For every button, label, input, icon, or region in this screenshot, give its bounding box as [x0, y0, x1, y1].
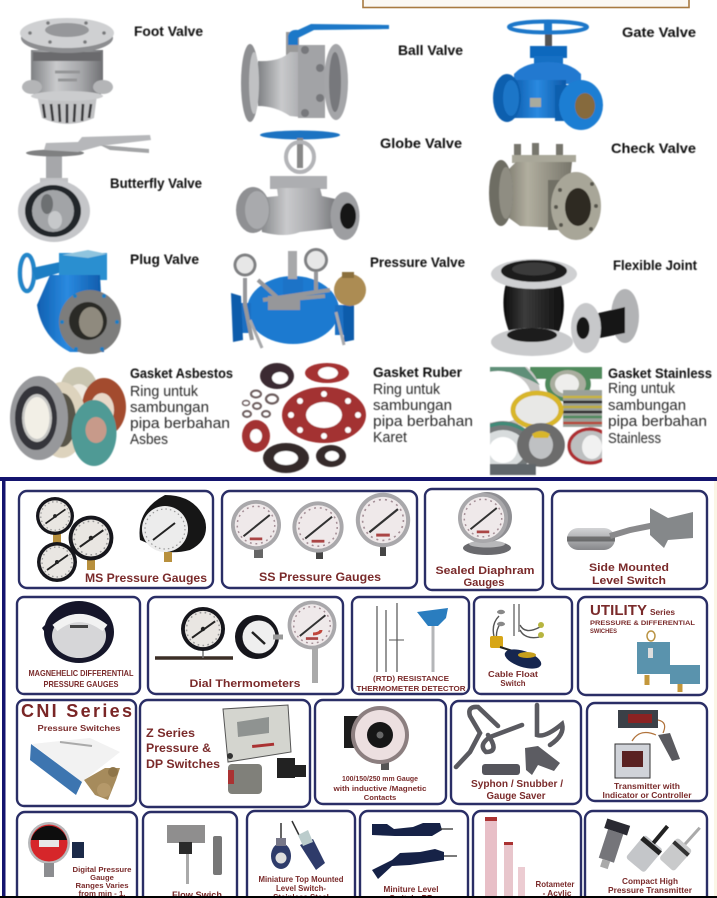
icon: check valve: [489, 143, 601, 240]
label: compact transmitter: Pressure Transmitter: [608, 886, 693, 895]
label: gasket ruber: Ring untuk: [373, 382, 441, 398]
product grid: valves: [10, 18, 712, 475]
icon: flow switch: [167, 825, 222, 884]
label: Z series: Pressure &: [146, 742, 212, 755]
icon: rubber gaskets: [242, 363, 366, 473]
icon: mini level switches: [372, 823, 457, 879]
label: sealed diaphragm gauges: Sealed Diaphram: [436, 565, 535, 577]
icon: digital gauge: [28, 822, 84, 877]
label: globe valve: Globe Valve: [380, 135, 462, 151]
label: RTD detector: (RTD) RESISTANCE: [373, 674, 449, 683]
label: transmitter: Transmitter with: [614, 782, 680, 791]
icon: magnehelic gauge: [42, 601, 114, 663]
label: CNI series: CNI Series: [21, 701, 132, 721]
panel: flow switch: [143, 812, 237, 898]
label: gasket asbestos: [130, 365, 233, 448]
panel: rotameter: [473, 811, 581, 898]
label: digital pressure gauge: from min - 1,: [78, 889, 126, 898]
icon: rotameter tubes: [485, 817, 525, 896]
icon: butterfly valve: [18, 135, 151, 242]
panel: compact transmitter: [585, 811, 707, 898]
panel: dial thermometers: [148, 597, 343, 694]
icon: mini top switches: [271, 821, 325, 870]
panel: MS pressure gauges: [19, 491, 213, 588]
label: flexible joint: Flexible Joint: [613, 257, 697, 273]
label: rotameter: Rotameter: [536, 880, 575, 889]
panel: miniature level switch: [360, 811, 468, 898]
panel: sealed diaphragm gauges: [425, 489, 543, 590]
label: check valve: Check Valve: [611, 140, 696, 156]
label: gasket ruber: Karet: [373, 430, 407, 446]
label: miniature top mounted: Miniature Top Mounted: [258, 875, 344, 884]
label: gasket asbestos: pipa berbahan: [130, 416, 230, 432]
label: gasket ruber: sambungan: [373, 398, 452, 414]
icon: asbestos gaskets: [10, 367, 126, 466]
label: compact transmitter: Compact High: [622, 877, 678, 886]
label: gasket stainless: Ring untuk: [608, 381, 676, 397]
label: cable float switch: Cable Float: [488, 670, 538, 679]
label: utility series: [590, 602, 695, 635]
label: rotameter: [536, 880, 575, 898]
label: gasket asbestos: Ring untuk: [130, 384, 199, 400]
label: utility series: Series: [650, 608, 675, 617]
label: transmitter: [602, 782, 692, 800]
label: pressure valve: Pressure Valve: [370, 254, 465, 270]
label: gasket stainless: pipa berbahan: [608, 414, 707, 430]
label: gate valve: Gate Valve: [622, 24, 696, 40]
icon: foot valve: [20, 18, 114, 124]
label: Z series: [146, 727, 220, 771]
icon: contact gauge: [344, 706, 409, 770]
icon: cable float: [490, 604, 544, 672]
icon: compact transmitters: [592, 818, 707, 873]
panel: transmitter: [587, 703, 707, 801]
panel: inductive gauge: [315, 700, 446, 804]
label: utility series: PRESSURE & DIFFERENTIAL: [590, 620, 695, 627]
catalogue panels: [17, 489, 707, 898]
label: CNI series: [21, 701, 132, 733]
icon: level switch: [567, 508, 693, 550]
panel: RTD detector: [352, 597, 469, 694]
icon: pressure valve: [231, 248, 366, 348]
label: inductive gauge: 100/150/250 mm Gauge: [342, 774, 418, 783]
label: gasket stainless: Gasket Stainless: [608, 365, 712, 381]
label: inductive gauge: [332, 774, 426, 802]
label: CNI series: Pressure Switches: [38, 723, 121, 733]
label: digital pressure gauge: Gauge: [90, 873, 114, 882]
label: inductive gauge: Contacts: [364, 793, 396, 802]
label: syphon snubber: [471, 779, 563, 802]
label: gasket ruber: Gasket Ruber: [373, 364, 463, 380]
label: digital pressure gauge: [72, 865, 132, 898]
icon: utility switches: [637, 631, 700, 692]
label: RTD detector: [356, 674, 466, 693]
icon: ball valve: [241, 24, 389, 122]
label: gasket asbestos: sambungan: [130, 400, 209, 416]
panel: Z series: [140, 700, 310, 807]
label: gasket ruber: pipa berbahan: [373, 414, 473, 430]
icon: diaphragm gauge: [458, 492, 512, 555]
bottom black edge: [0, 896, 717, 898]
panel: cable float switch: [474, 597, 572, 694]
icon: syphon tubes: [456, 705, 562, 775]
label: gasket stainless: sambungan: [608, 398, 686, 414]
label: SS pressure gauges: SS Pressure Gauges: [259, 571, 381, 584]
panel: utility series: [578, 597, 707, 695]
icon: SS gauges group: [231, 493, 410, 559]
icon: stainless gaskets: [489, 366, 603, 476]
label: dial thermometers: Dial Thermometers: [190, 678, 300, 690]
label: Z series: DP Switches: [146, 758, 220, 771]
lower catalogue frame: [0, 477, 717, 898]
label: utility series: UTILITY: [590, 602, 647, 619]
label: syphon snubber: Syphon / Snubber /: [471, 779, 563, 790]
panel: side mounted level switch: [552, 491, 707, 589]
label: sealed diaphragm gauges: [436, 565, 535, 589]
label: ball valve: Ball Valve: [398, 42, 463, 58]
label: digital pressure gauge: Ranges Varies: [76, 881, 128, 890]
label: gasket asbestos: Asbes: [130, 432, 168, 448]
label: gasket stainless: [608, 365, 712, 447]
label: inductive gauge: with inductive /Magnetic: [332, 784, 426, 793]
label: side mounted level switch: Side Mounted: [589, 562, 669, 574]
label: plug valve: Plug Valve: [130, 251, 199, 267]
panel: digital pressure gauge: [17, 812, 137, 898]
icon: gate valve: [493, 22, 603, 130]
icon: plug valve: [20, 250, 121, 354]
label: foot valve: Foot Valve: [134, 23, 203, 39]
label: side mounted level switch: [589, 562, 669, 587]
label: cable float switch: Switch: [500, 679, 526, 688]
label: RTD detector: THERMOMETER DETECTOR: [356, 684, 466, 693]
label: magnehelic gauges: [28, 669, 134, 689]
icon: CNI switch: [30, 738, 120, 800]
label: cable float switch: [488, 670, 538, 688]
label: Z series: Z Series: [146, 727, 195, 740]
panel: magnehelic gauges: [17, 597, 140, 694]
label: miniature level switch: Miniture Level: [384, 884, 438, 894]
top header box: [363, 0, 689, 8]
icon: flexible joint: [491, 259, 639, 356]
panel: SS pressure gauges: [222, 491, 417, 588]
label: syphon snubber: Gauge Saver: [486, 791, 546, 802]
label: sealed diaphragm gauges: Gauges: [463, 577, 505, 589]
panel: miniature top mounted: [247, 811, 355, 898]
icon: RTD probes: [377, 603, 448, 672]
label: side mounted level switch: Level Switch: [592, 575, 666, 587]
label: magnehelic gauges: MAGNEHELIC DIFFERENTIAL: [28, 669, 134, 678]
label: gasket asbestos: Gasket Asbestos: [130, 365, 233, 381]
label: utility series: SWICHES: [590, 628, 618, 635]
icon: Z switch: [223, 705, 306, 794]
label: rotameter: - Acylic: [543, 889, 572, 898]
panel: CNI series: [17, 700, 136, 806]
label: MS pressure gauges: MS Pressure Gauges: [85, 572, 207, 585]
label: compact transmitter: [608, 877, 693, 898]
label: digital pressure gauge: Digital Pressure: [72, 865, 132, 874]
label: miniature top mounted: [258, 875, 344, 898]
label: butterfly valve: Butterfly Valve: [110, 175, 202, 191]
icon: transmitter: [615, 710, 680, 778]
label: transmitter: Indicator or Controller: [602, 791, 692, 800]
label: miniature top mounted: Level Switch-: [276, 884, 326, 893]
icon: thermometers: [155, 601, 336, 683]
label: gasket ruber: [373, 364, 473, 446]
label: gasket stainless: Stainless: [608, 431, 661, 447]
panel: syphon snubber: [451, 701, 581, 804]
label: magnehelic gauges: PRESSURE GAUGES: [44, 680, 119, 689]
icon: MS gauges group: [36, 495, 206, 582]
icon: globe valve: [236, 130, 360, 240]
